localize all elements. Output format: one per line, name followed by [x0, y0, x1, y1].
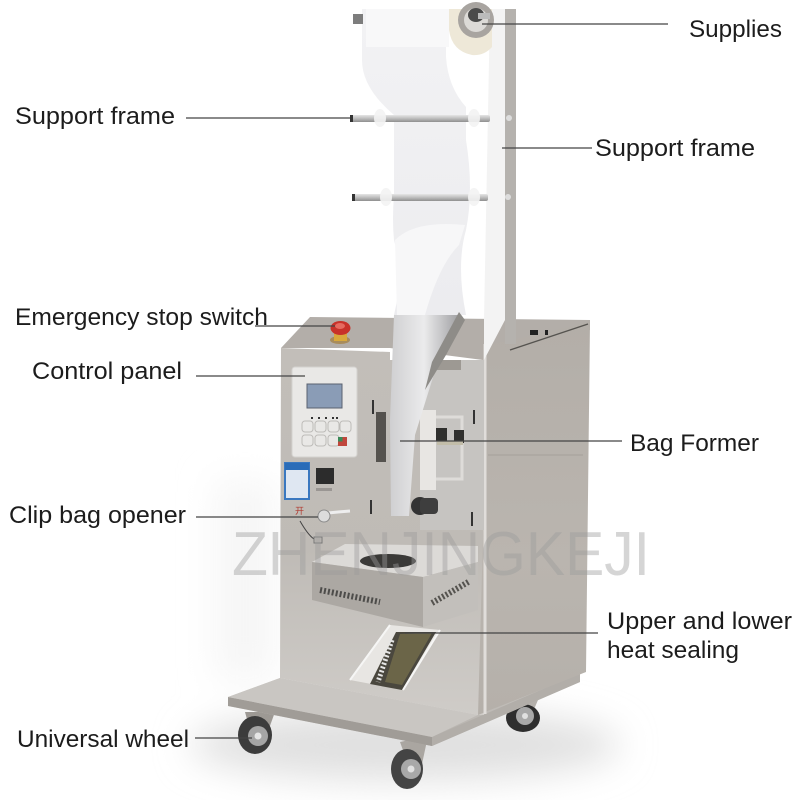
callout: support frame right: Support frame: [595, 135, 755, 162]
forming funnel: [390, 315, 458, 516]
callout: support frame left: Support frame: [15, 103, 175, 130]
callout: universal wheel: Universal wheel: [17, 726, 189, 753]
machine illustration: [228, 317, 590, 789]
cabinet: [280, 317, 590, 715]
wheel: rear right: [506, 700, 540, 732]
top face: [281, 317, 590, 360]
lower rod: [352, 188, 488, 206]
support post: [484, 9, 516, 360]
guide rods: [350, 109, 490, 206]
callout: upper and lower heat sealing: heat sealing: [607, 637, 739, 664]
front panel: [280, 348, 484, 715]
discharge chute: [350, 625, 440, 690]
wheel: front centre: [391, 736, 428, 789]
clip bag opener: 开: [295, 506, 304, 516]
film roll and web: [353, 2, 494, 516]
callout: supplies: Supplies: [689, 16, 782, 43]
side panel: [478, 322, 590, 715]
wheel: front left: [238, 712, 275, 754]
wheels: [238, 700, 540, 789]
film web: [362, 9, 470, 315]
connector sockets: [530, 330, 548, 335]
watermark: ZHENJINGKEJI: [232, 520, 650, 589]
hopper tray: [312, 544, 478, 627]
bag former assembly: [371, 360, 484, 530]
emergency stop button: [330, 321, 350, 344]
callout: emergency stop switch: Emergency stop switch: [15, 304, 268, 331]
callout: clip bag opener: Clip bag opener: [9, 502, 186, 529]
callout: control panel: Control panel: [32, 358, 182, 385]
callout: bag former: Bag Former: [630, 430, 759, 457]
info sticker and indicator: [285, 463, 334, 499]
upper rod: [350, 109, 490, 127]
callout: upper and lower heat sealing: Upper and lower: [607, 608, 792, 635]
base plate: [228, 673, 580, 746]
callout: upper and lower heat sealing: [405, 608, 792, 664]
floor shadow: [190, 480, 620, 781]
clip bag opener: [295, 506, 350, 543]
film roll: [353, 2, 494, 55]
control panel: [292, 367, 357, 457]
